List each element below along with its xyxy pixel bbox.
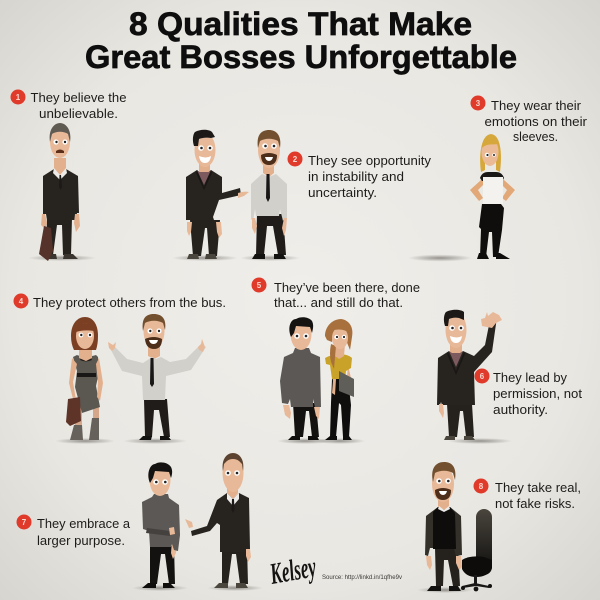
figure: bearded man with raised arms (108, 314, 206, 444)
text: quality 3: emotions on their (484, 114, 588, 129)
badge 3: 3 (476, 99, 481, 108)
text: quality 8: They take real, (495, 480, 581, 495)
figure: woman with blond hair (408, 134, 515, 262)
panel: quality 7 (16, 453, 263, 591)
title: 8 Qualities That Make (129, 6, 472, 42)
badge 7 (16, 514, 32, 530)
panel: quality 1 (10, 90, 127, 261)
signature and source: Source: http://linkd.in/1qfhe9v (322, 575, 402, 581)
badge 5 (252, 278, 266, 292)
text: quality 2 (308, 153, 432, 200)
text: quality 7 (37, 516, 131, 548)
text: quality 2: They see opportunity (308, 153, 432, 168)
signature and source: Kelsey (267, 550, 319, 591)
text: quality 5 (274, 280, 420, 310)
figure: woman in grey dress with briefcase (55, 317, 115, 444)
text: quality 1: unbelievable. (39, 106, 118, 121)
text: quality 8 (495, 480, 581, 511)
signature and source (267, 550, 402, 591)
figure: man in suit gesturing (172, 130, 249, 261)
figure: man with moustache and briefcase (28, 123, 96, 261)
badge 5: 5 (257, 281, 262, 290)
text: quality 7: larger purpose. (37, 533, 125, 548)
title (85, 6, 517, 75)
text: quality 7: They embrace a (37, 516, 131, 531)
figure: bearded man in white shirt (240, 130, 300, 261)
text: quality 6: authority. (493, 402, 548, 417)
title: Great Bosses Unforgettable (85, 39, 517, 75)
text: quality 2: uncertainty. (308, 185, 377, 200)
badge 6 (474, 368, 490, 384)
panel: quality 4 (14, 294, 226, 444)
text: quality 3: sleeves. (513, 129, 558, 144)
text: quality 8: not fake risks. (495, 496, 575, 511)
text: quality 5: that... and still do that. (274, 295, 403, 310)
panel: quality 5 (252, 278, 420, 444)
text: quality 4: They protect others from the bus. (33, 295, 226, 310)
text: quality 5: They’ve been there, done (274, 280, 420, 295)
badge 7: 7 (22, 518, 27, 527)
badge 1 (10, 90, 26, 104)
badge 6: 6 (480, 372, 485, 381)
panel: quality 8 (417, 462, 581, 593)
text: quality 3: They wear their (491, 98, 582, 113)
panel: quality 6 (437, 310, 582, 444)
text: quality 2: in instability and (308, 169, 404, 184)
icon: office chair (461, 509, 492, 591)
panel: quality 3 (408, 96, 588, 262)
figure: man in grey turtleneck (277, 317, 333, 444)
badge 8 (474, 478, 488, 494)
badge 2 (288, 152, 302, 166)
text: quality 6: permission, not (493, 386, 582, 401)
figure: bearded man in black sweater (417, 462, 473, 593)
badge 4 (14, 294, 28, 308)
panel: quality 2 (172, 130, 432, 261)
text: quality 6: They lead by (493, 370, 567, 385)
text: quality 6 (493, 370, 582, 417)
figure: man in suit waving (437, 310, 512, 444)
figure: woman in yellow top with folder (315, 319, 365, 444)
badge 8: 8 (479, 482, 484, 491)
text: quality 1 (30, 90, 127, 121)
figure: man in suit pointing (185, 453, 263, 591)
badge 4: 4 (19, 297, 24, 306)
text: quality 1: They believe the (30, 90, 127, 105)
badge 3 (470, 96, 486, 110)
figure: man in grey turtleneck shaking hands (132, 462, 188, 591)
text: quality 3 (484, 98, 588, 144)
badge 1: 1 (16, 93, 21, 102)
badge 2: 2 (293, 155, 298, 164)
